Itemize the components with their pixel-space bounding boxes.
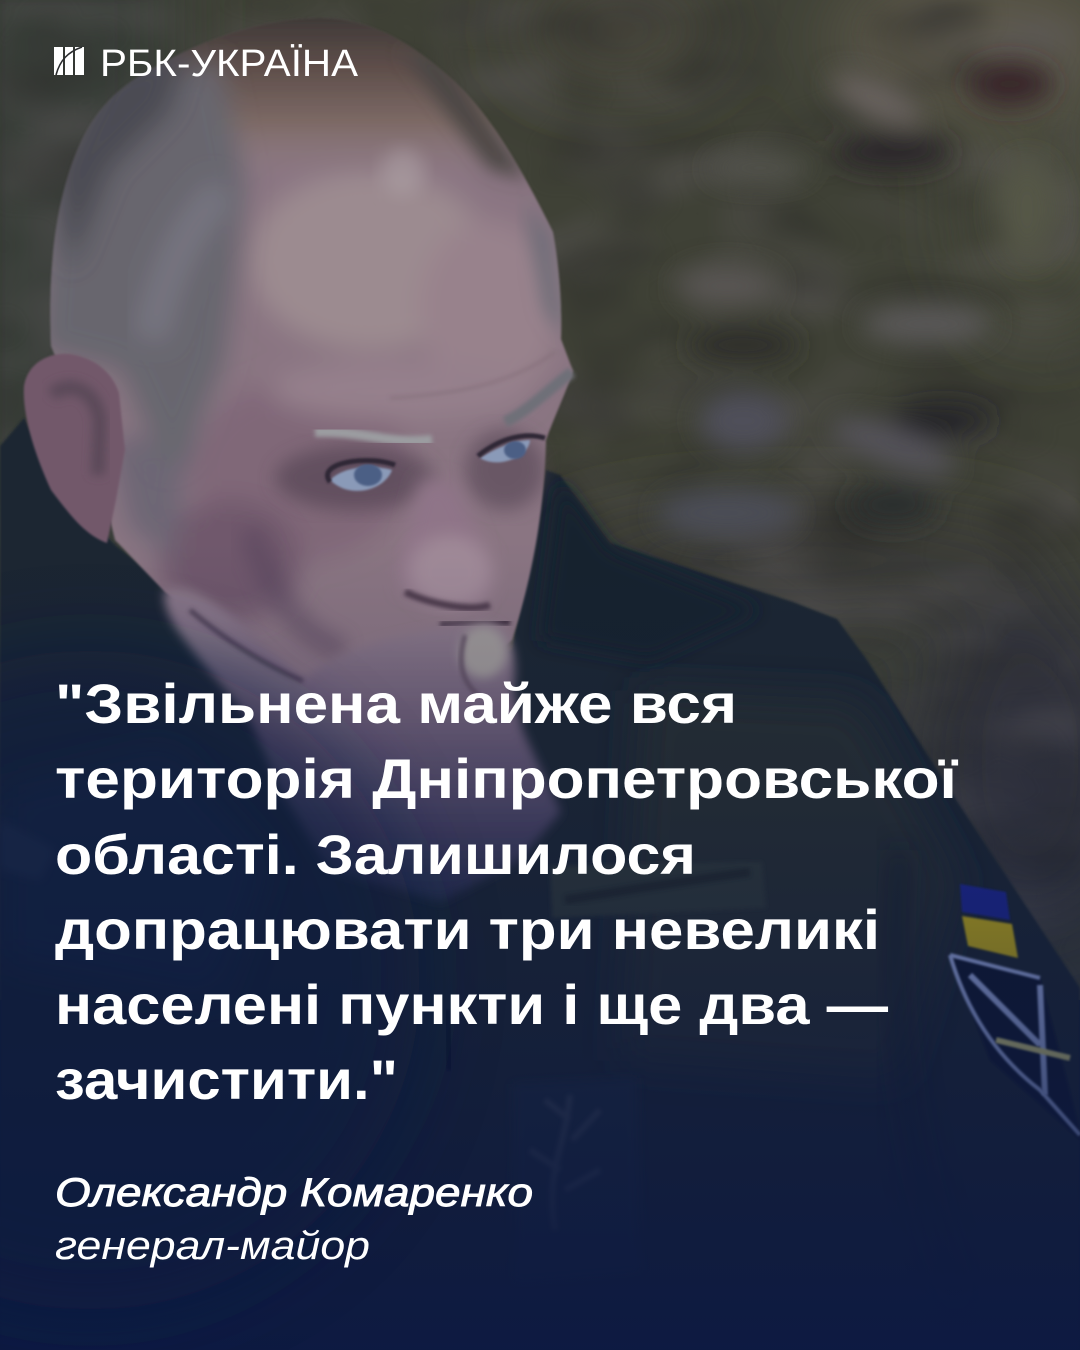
photo background: blurred foliage [0,0,1080,1000]
photo: shoulder patches [950,884,1080,1140]
embroidered pocket [513,1078,640,1280]
quote text: населені пункти і ще два — [55,973,888,1036]
photo: hand on chin [164,589,561,902]
speaker name: Олександр Комаренко [55,1171,533,1215]
sleeve lettering [0,820,55,880]
speaker rank: генерал-майор [55,1224,370,1268]
quote text [55,672,958,1111]
quote text: області. Залишилося [55,823,696,886]
quote text: допрацювати три невеликі [55,898,880,961]
quote text: зачистити." [55,1048,398,1111]
quote text: "Звільнена майже вся [55,672,737,735]
zipper [447,1010,450,1070]
attribution [55,1171,533,1268]
photo: ear [24,354,125,543]
logo: РБК-Україна [54,43,359,85]
quote text: територія Дніпропетровської [55,747,958,810]
photo: head with hair [49,18,574,684]
photo: general's jacket [0,418,1080,1350]
logo mark [54,47,84,75]
logo wordmark: РБК-УКРАЇНА [100,43,359,85]
name tape on chest [550,862,766,918]
photo: face details (eyes, brows, nose) [250,352,572,650]
